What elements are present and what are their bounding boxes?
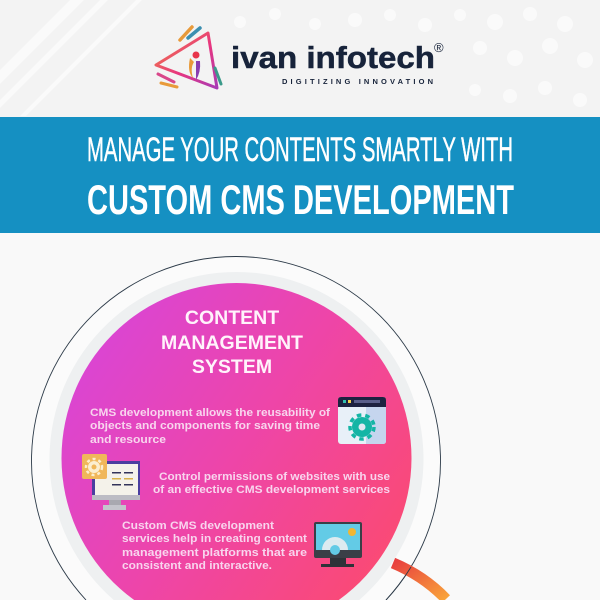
- text block: reusability: and resource: [90, 434, 166, 446]
- text block: permissions: of an effective CMS development services: [153, 484, 390, 496]
- logo tagline: DIGITIZING INNOVATION: [282, 77, 433, 86]
- logo wordmark: ivan infotech: [231, 40, 435, 75]
- logo: [156, 27, 444, 88]
- text block: custom cms: [122, 520, 307, 572]
- magnifier glass ring: [49, 272, 423, 600]
- header band: [0, 117, 600, 233]
- text block: custom cms: consistent and interactive.: [122, 560, 272, 572]
- magnifier: [31, 257, 446, 600]
- text block: permissions: Control permissions of websites with use: [159, 471, 390, 483]
- magnifier outer ring: [31, 257, 440, 600]
- text block: reusability: [90, 407, 330, 446]
- text block: reusability: CMS development allows the reusability of: [90, 407, 330, 419]
- text block: custom cms: services help in creating content: [122, 533, 307, 545]
- registered mark: ®: [434, 40, 444, 55]
- icon: monitor with landscape: [314, 522, 362, 567]
- text block: permissions: [153, 471, 390, 496]
- icon: desktop monitor with gear: [82, 454, 140, 510]
- logo icon: triangle: [156, 27, 221, 88]
- magnifier handle: [393, 563, 446, 599]
- panel: content management system circle: [61, 283, 411, 600]
- heading: [161, 307, 303, 378]
- text block: custom cms: management platforms that are: [122, 547, 307, 559]
- text block: custom cms: Custom CMS development: [122, 520, 274, 532]
- heading: SYSTEM: [192, 356, 272, 378]
- heading: MANAGEMENT: [161, 332, 303, 354]
- icon: browser gear: [338, 397, 386, 444]
- heading: CONTENT: [185, 307, 279, 329]
- text block: reusability: objects and components for saving time: [90, 420, 320, 432]
